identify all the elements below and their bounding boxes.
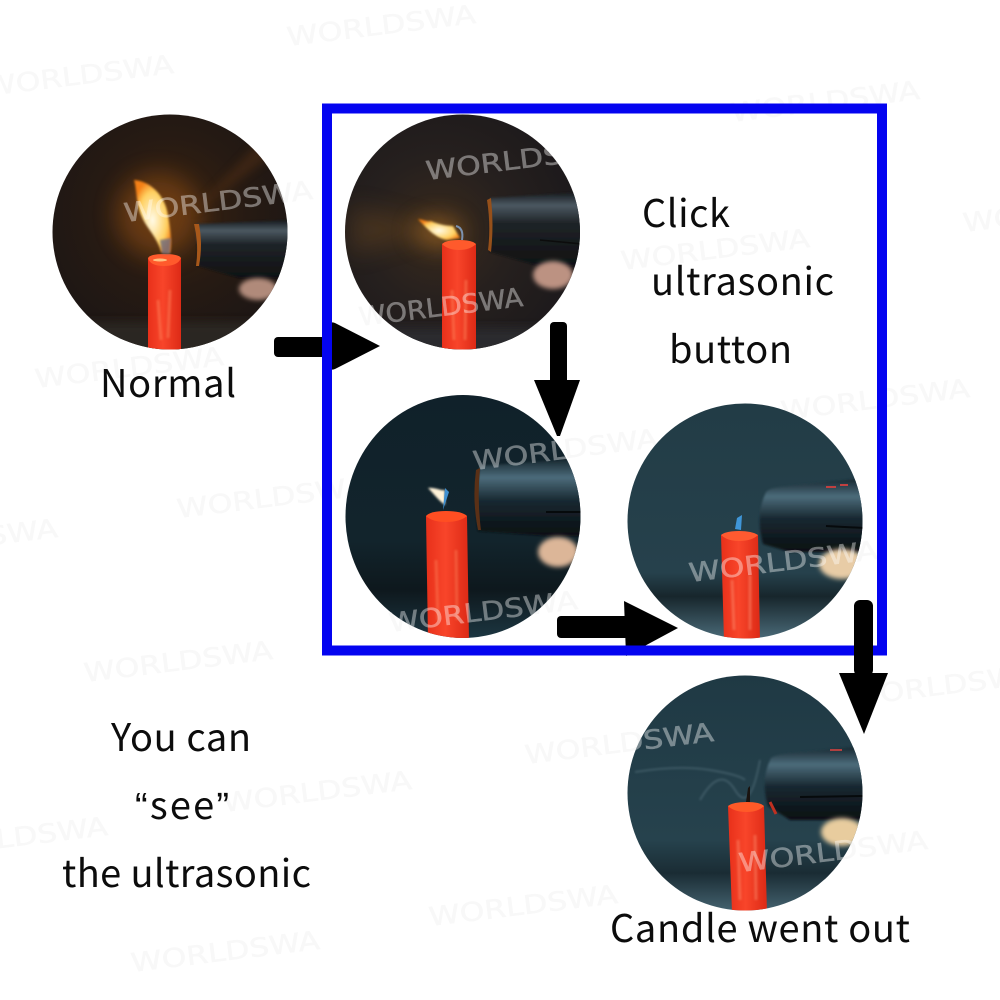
watermarks on bent-flame photo: WORLDSWA (357, 283, 525, 333)
instruction text: click ultrasonic button: Click (642, 183, 730, 238)
arrow: normal to click (274, 322, 380, 370)
photo: normal candle flame (52, 114, 290, 354)
faint background watermarks: WORLDSWA (687, 536, 880, 589)
faint background watermarks: WORLDSWA (387, 586, 580, 639)
faint background watermarks: WORLDSWA (221, 766, 414, 819)
faint background watermarks: WORLDSWA (729, 76, 922, 129)
watermarks on bent-flame photo (370, 148, 558, 322)
instruction text: click ultrasonic button: ultrasonic (651, 251, 834, 306)
finger (821, 818, 863, 846)
blue frame: ultrasonic button steps (327, 108, 882, 650)
faint background watermarks: WORLDSWA (523, 718, 716, 771)
candle (721, 531, 760, 640)
watermark on almost-out photo: WORLDSWA (687, 536, 880, 589)
flame (418, 219, 462, 240)
faint background watermarks: WORLDSWA (619, 224, 812, 277)
watermarks on shrinking-flame photo: WORLDSWA (471, 424, 664, 477)
finger (538, 537, 578, 567)
flame (134, 180, 171, 254)
caption: you can see the ultrasonic: the ultrasonic (62, 843, 311, 898)
candle (426, 511, 469, 640)
ultrasonic device (765, 746, 865, 820)
watermarks on candle-out photo (636, 722, 852, 872)
caption: you can see the ultrasonic: “see” (135, 775, 229, 830)
photo: flame shrinking (345, 394, 585, 640)
ultrasonic device (474, 458, 585, 536)
label: Normal: Normal (100, 353, 236, 408)
faint background watermarks: WORLDSWA (779, 374, 972, 427)
ultrasonic device (487, 192, 585, 266)
smoke (635, 760, 760, 800)
watermark on normal photo: WORLDSWA (122, 176, 315, 229)
wick (746, 786, 750, 802)
faint background watermarks: WORLDSWA (33, 342, 226, 395)
photo: flame almost out (627, 403, 865, 640)
arrow: step 2 to step 3 (557, 601, 678, 656)
candle (728, 802, 767, 912)
candle (148, 254, 181, 352)
watermarks on candle-out photo: WORLDSWA (737, 826, 930, 879)
arrow: step 1 to step 2 (534, 322, 580, 436)
faint background watermarks: WORLDSWA (427, 880, 620, 933)
faint background watermarks: WORLDSWA (82, 636, 275, 689)
small flame (428, 488, 449, 510)
faint background watermarks: WORLDSWA (122, 176, 315, 229)
photo: flame bent by ultrasonic (344, 114, 585, 354)
finger (533, 261, 573, 289)
tiny blue flame (735, 515, 742, 530)
caption: you can see the ultrasonic: You can (110, 707, 251, 762)
watermarks on shrinking-flame photo: WORLDSWA (387, 587, 575, 639)
ultrasonic device (194, 220, 290, 278)
watermarks on shrinking-flame photo (391, 440, 566, 628)
instruction text: click ultrasonic button: button (669, 319, 792, 374)
label: candle went out: Candle went out (610, 898, 910, 953)
finger (819, 549, 865, 579)
caption: you can see the ultrasonic (62, 707, 311, 898)
faint background watermarks: WORLDSWA (175, 472, 368, 525)
faint background watermarks: WORLDSWA (357, 283, 525, 333)
photo: candle out with smoke (627, 675, 865, 912)
faint background watermarks: WORLDSWA (129, 926, 322, 979)
faint background watermarks: WORLDSWA (737, 826, 930, 879)
arrow: step 3 to candle out (839, 600, 888, 734)
candle (442, 240, 476, 352)
faint background watermarks: WORLDSWA (467, 424, 660, 477)
instruction text: click ultrasonic button (642, 183, 834, 374)
finger (239, 278, 277, 300)
watermarks on bent-flame photo: WORLDSWA (424, 134, 615, 187)
ultrasonic device (760, 478, 865, 552)
faint background watermarks: WORLDSWA (285, 0, 478, 53)
watermarks on candle-out photo: WORLDSWA (523, 718, 716, 771)
